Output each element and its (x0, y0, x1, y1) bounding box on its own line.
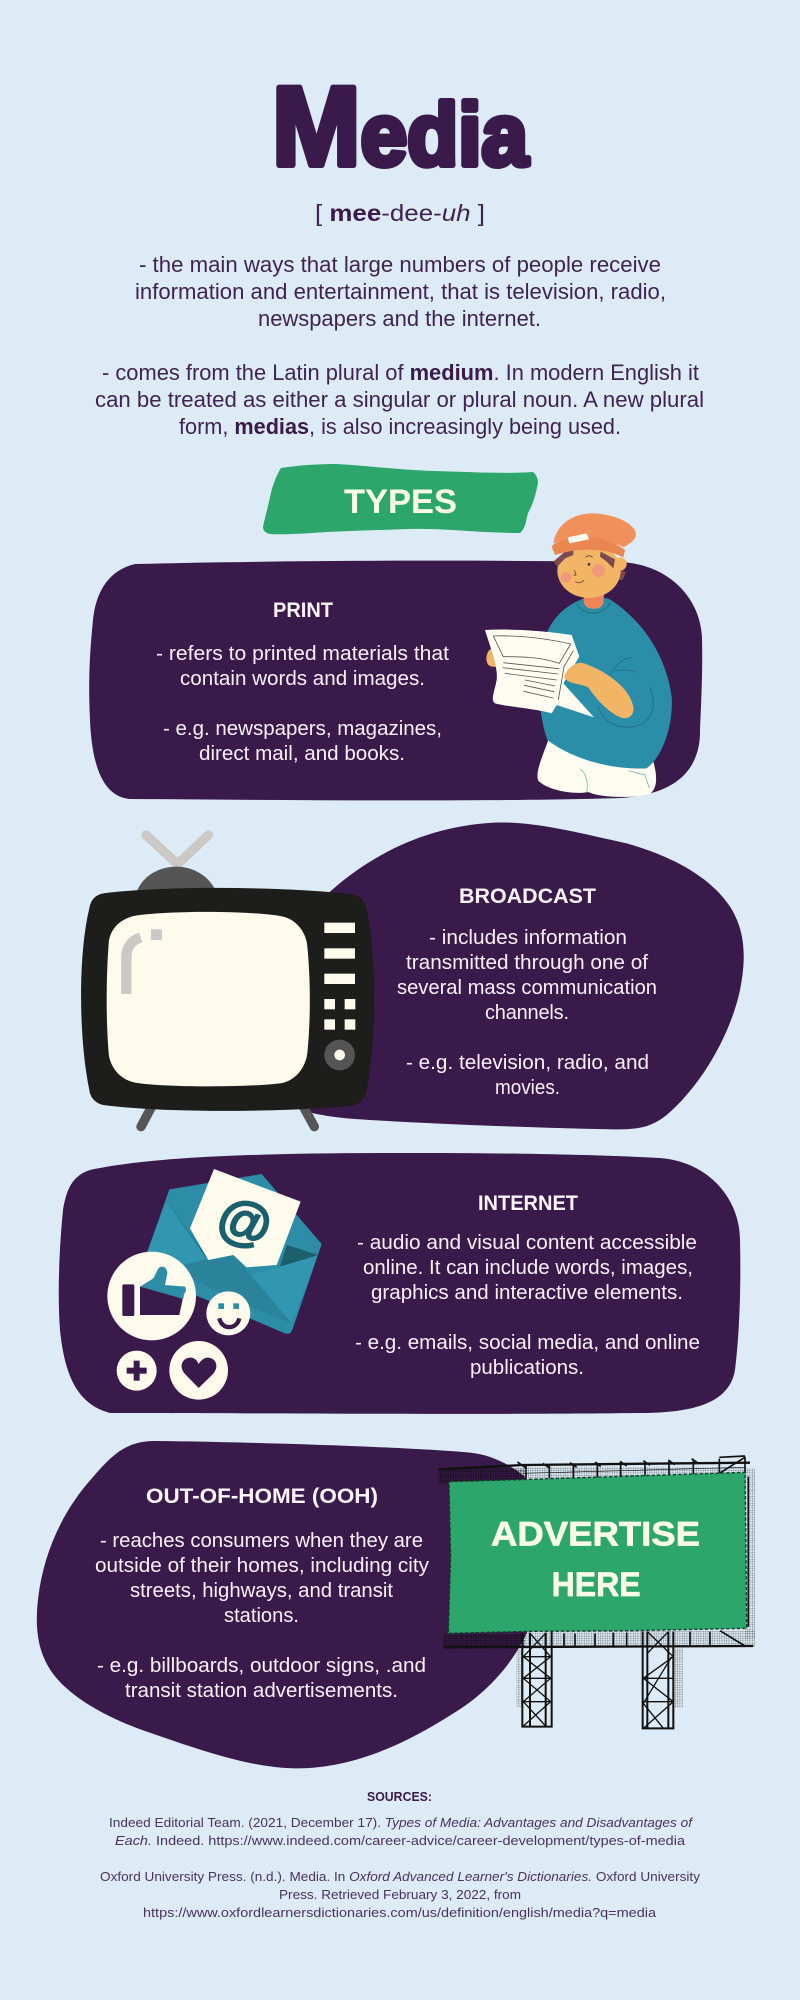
out-of-home text: outside of their homes, including city (95, 1555, 429, 1577)
source: Indeed: Indeed Editorial Team. (2021, December 17). Types of Media: Advantages and Disadvantages of (109, 1815, 693, 1830)
source: Indeed (109, 1815, 693, 1848)
definition text: form, medias, is also increasingly being used. (179, 414, 621, 439)
types banner (263, 464, 538, 534)
internet text: publications. (470, 1357, 584, 1379)
definition text: information and entertainment, that is television, radio, (135, 279, 666, 304)
internet text: - e.g. emails, social media, and online (355, 1332, 700, 1354)
billboard sign (448, 1472, 747, 1633)
out-of-home text: streets, highways, and transit (130, 1580, 393, 1602)
definition text: newspapers and the internet. (258, 306, 541, 331)
types heading: TYPES (344, 483, 457, 521)
source: Indeed: Each. Indeed. https://www.indeed.com/career-advice/career-development/types-of-media (115, 1833, 686, 1848)
panel: out-of-home (37, 1441, 528, 1768)
panel: internet (59, 1153, 740, 1414)
icon: envelope: @ (211, 1185, 278, 1258)
definition text: - the main ways that large numbers of people receive (139, 252, 661, 277)
source: Oxford (100, 1869, 701, 1920)
out-of-home text (95, 1530, 429, 1702)
print text: direct mail, and books. (199, 743, 405, 765)
source: Oxford: Oxford University Press. (n.d.). Media. In Oxford Advanced Learner's Dictionaries. Oxford University (100, 1869, 701, 1884)
print heading: PRINT (273, 599, 333, 622)
out-of-home text: - reaches consumers when they are (100, 1530, 423, 1552)
out-of-home text: transit station advertisements. (125, 1680, 398, 1702)
icon: plus (117, 1351, 157, 1391)
icon: person reading newspaper (485, 513, 672, 797)
icon: thumbs up (107, 1252, 196, 1340)
icon: television (81, 835, 374, 1127)
icon: billboard (438, 1456, 755, 1728)
out-of-home heading: OUT-OF-HOME (OOH) (146, 1485, 378, 1508)
definition text (95, 252, 704, 439)
broadcast text: - e.g. television, radio, and (406, 1052, 649, 1074)
broadcast text: channels. (485, 1002, 569, 1024)
billboard sign: ADVERTISE (491, 1515, 700, 1553)
definition text: - comes from the Latin plural of medium. In modern English it (102, 360, 699, 385)
broadcast text: - includes information (429, 927, 627, 949)
billboard sign: HERE (552, 1566, 641, 1604)
panel: broadcast (280, 822, 744, 1129)
definition text: can be treated as either a singular or plural noun. A new plural (95, 387, 704, 412)
print text: contain words and images. (180, 668, 425, 690)
broadcast text: transmitted through one of (406, 952, 648, 974)
pronunciation: [ mee -dee- uh ] (315, 200, 485, 226)
broadcast text (397, 927, 657, 1099)
internet text: online. It can include words, images, (363, 1257, 693, 1279)
source: Oxford: https://www.oxfordlearnersdictionaries.com/us/definition/english/media?q=media (143, 1905, 657, 1920)
icon: envelope (147, 1169, 322, 1334)
internet text: - audio and visual content accessible (357, 1232, 697, 1254)
source: Oxford: Press. Retrieved February 3, 2022, from (279, 1887, 521, 1902)
panel: print (89, 561, 702, 800)
sources (100, 1789, 701, 1920)
icon: smiley (206, 1291, 250, 1335)
internet text: graphics and interactive elements. (371, 1282, 683, 1304)
out-of-home text: stations. (224, 1605, 299, 1627)
print text: - refers to printed materials that (156, 643, 449, 665)
icon: email and social icons (107, 1169, 322, 1400)
broadcast heading: BROADCAST (459, 885, 596, 908)
internet heading: INTERNET (478, 1192, 578, 1215)
broadcast text: movies. (495, 1077, 560, 1099)
print text: - e.g. newspapers, magazines, (163, 718, 442, 740)
title: Media (272, 64, 529, 189)
print text (156, 643, 449, 765)
broadcast text: several mass communication (397, 977, 657, 999)
internet text (355, 1232, 700, 1379)
icon: heart (169, 1341, 228, 1400)
sources heading: SOURCES: (367, 1789, 432, 1804)
out-of-home text: - e.g. billboards, outdoor signs, .and (97, 1655, 426, 1677)
